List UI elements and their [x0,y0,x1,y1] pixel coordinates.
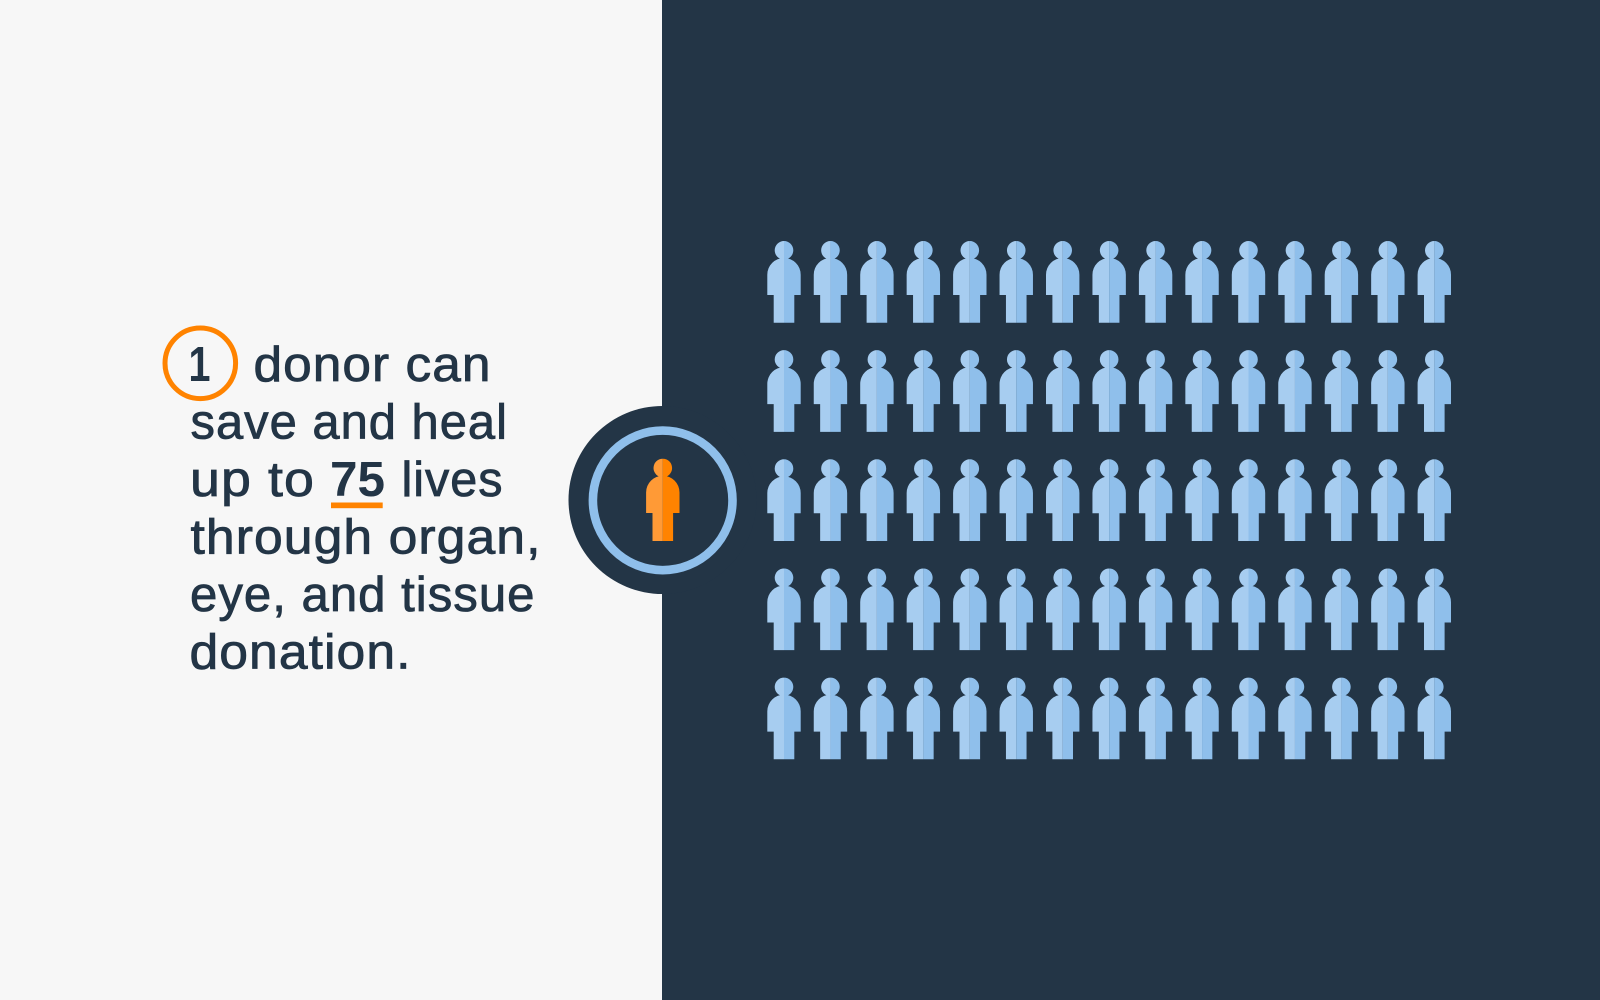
number 1 in orange circle [165,328,236,399]
row 4 of people [767,568,1451,650]
row 3 of people [767,459,1451,541]
line 3 [190,453,504,507]
number 1 in orange circle: 1 [188,338,210,392]
line 2: save and heal [190,396,508,450]
statement text [165,328,542,680]
icon: orange donor person [646,459,680,541]
grid of 75 people [767,241,1451,759]
line 6: donation. [190,626,412,680]
left background panel [0,0,662,1000]
row 5 of people [767,678,1451,759]
line 3: up to [190,453,315,507]
row 1 of people [767,241,1451,323]
underline beneath 75 [331,502,383,508]
line 3: lives [402,453,504,507]
dark right panel [662,0,1600,1000]
line 4: through organ, [190,510,542,564]
line 1: donor can [254,338,492,392]
line 3: 75 [330,453,385,507]
row 2 of people [767,350,1451,432]
donor badge: circle with orange person [568,406,756,594]
line 5: eye, and tissue [190,568,536,622]
